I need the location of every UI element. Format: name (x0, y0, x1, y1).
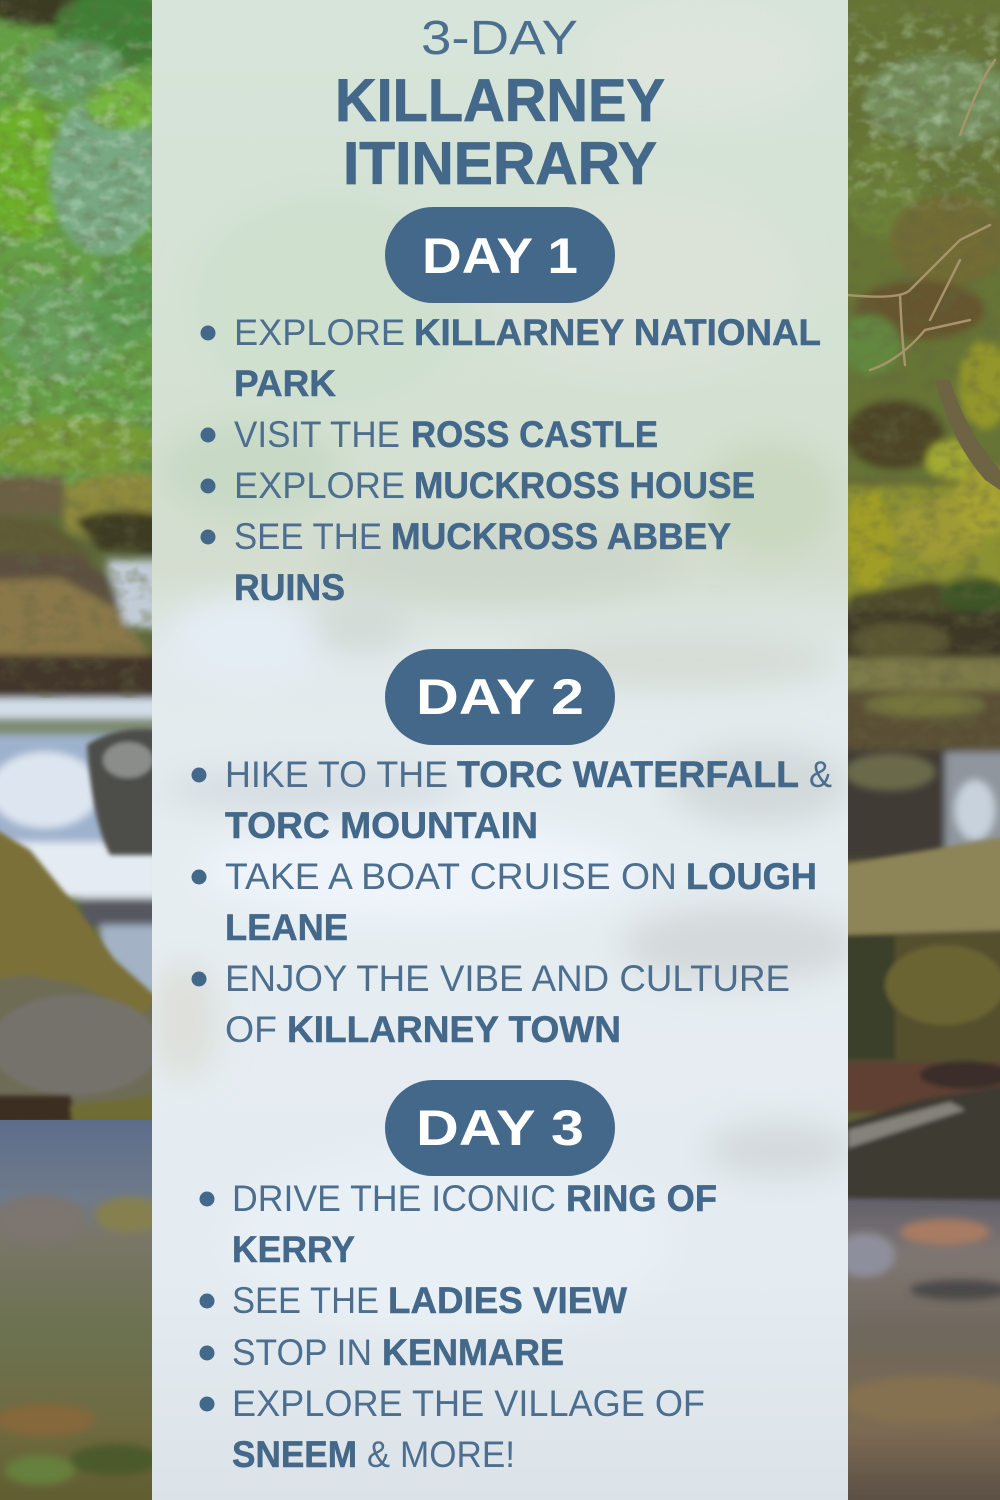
day 3 list: SNEEM (232, 1434, 357, 1475)
day 1 list: SEE THE (234, 516, 382, 557)
day 3 list: SEE THE (232, 1280, 379, 1321)
day 2 list: ENJOY THE VIBE AND CULTURE (225, 958, 790, 999)
day 1 list: MUCKROSS HOUSE (414, 465, 755, 506)
day 1 list: PARK (234, 363, 336, 404)
background photo: right forest stream strip (835, 0, 1000, 1500)
day 2 list: TORC WATERFALL (457, 754, 799, 795)
day 2 list: HIKE TO THE (225, 754, 448, 795)
day 3 list: DRIVE THE ICONIC (232, 1178, 556, 1219)
day 1 list: MUCKROSS ABBEY (391, 516, 731, 557)
day 3 list: KERRY (232, 1229, 355, 1270)
day 1 list: RUINS (234, 567, 345, 608)
day 2 list: LOUGH (686, 856, 817, 897)
day 2 list: OF (225, 1009, 277, 1050)
day 3 list: STOP IN (232, 1332, 372, 1373)
day 2 list: TORC MOUNTAIN (225, 805, 538, 846)
translucent center panel (151, 0, 860, 1500)
day 2 list: & (809, 754, 832, 795)
day 1 list: ROSS CASTLE (411, 414, 658, 455)
day 3 list (200, 1178, 717, 1475)
day 2 list: KILLARNEY TOWN (287, 1009, 621, 1050)
title: KILLARNEY (335, 67, 665, 134)
day 3 list: MORE! (400, 1434, 515, 1475)
day 1 list (200, 312, 821, 608)
day 1 list: EXPLORE (234, 312, 405, 353)
day 3 list: RING OF (566, 1178, 717, 1219)
day 3 list: & (367, 1434, 390, 1475)
day 2 list: LEANE (225, 907, 348, 948)
day 3 badge: DAY 3 (416, 1100, 584, 1156)
title: 3-DAY (421, 12, 578, 65)
day 1 badge: DAY 1 (422, 228, 578, 284)
title (335, 12, 665, 197)
day 2 badge (385, 649, 615, 745)
day 3 badge (385, 1080, 615, 1176)
day 3 list: EXPLORE THE VILLAGE OF (232, 1383, 705, 1424)
day 1 list: KILLARNEY NATIONAL (414, 312, 821, 353)
day 1 list: VISIT THE (234, 414, 400, 455)
day 1 list: EXPLORE (234, 465, 405, 506)
day 3 list: LADIES VIEW (388, 1280, 627, 1321)
day 3 list: KENMARE (382, 1332, 564, 1373)
day 2 badge: DAY 2 (416, 669, 584, 725)
day 2 list (192, 754, 832, 1050)
title: ITINERARY (343, 130, 657, 197)
day 1 badge (385, 207, 615, 303)
background photo: left forest stream strip (0, 0, 152, 1500)
day 2 list: TAKE A BOAT CRUISE ON (225, 856, 677, 897)
